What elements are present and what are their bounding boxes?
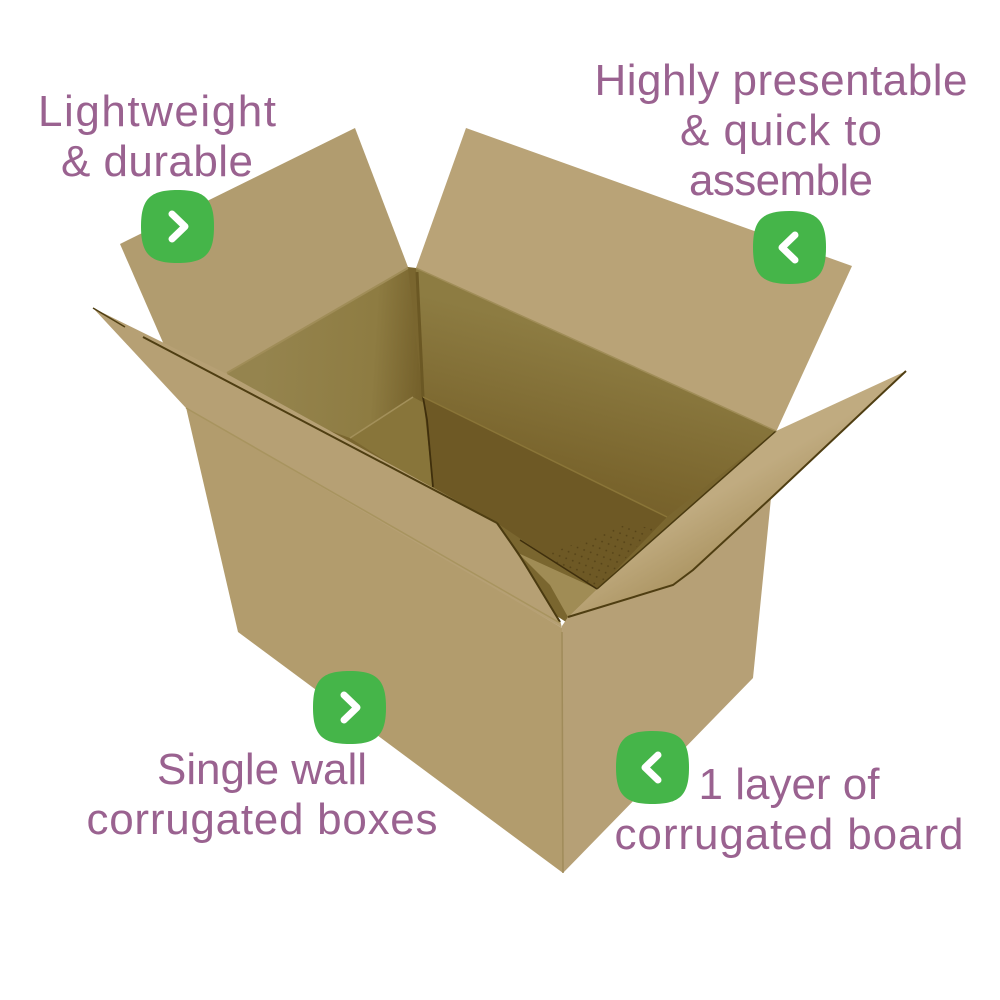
- cardboard box: [93, 128, 906, 873]
- label: highly presentable: & quick to: [680, 106, 882, 155]
- icon: right arrow top left: [141, 190, 214, 263]
- interior back-left wall: [227, 268, 423, 438]
- box edges and creases: [93, 268, 906, 873]
- label: highly presentable: [594, 56, 968, 205]
- label: single wall: corrugated boxes: [86, 795, 438, 844]
- back-right flap: [416, 128, 852, 432]
- label: lightweight and durable: Lightweight: [38, 87, 276, 136]
- interior base: [227, 267, 776, 622]
- label: highly presentable: Highly presentable: [594, 56, 968, 105]
- interior back-right wall: [416, 268, 776, 517]
- label: one layer: corrugated board: [614, 810, 964, 859]
- label: one layer: 1 layer of: [698, 760, 880, 809]
- label: lightweight and durable: & durable: [61, 137, 253, 186]
- icon: left arrow bottom right: [616, 731, 689, 804]
- icon: right arrow bottom left: [313, 671, 386, 744]
- label: single wall: Single wall: [157, 745, 367, 794]
- back-left flap: [120, 128, 408, 420]
- front-left flap: [93, 308, 562, 628]
- icon: left arrow top right: [753, 211, 826, 284]
- interior lower wall: [423, 397, 667, 590]
- dotted shadow on the lower wall: [545, 525, 655, 588]
- inner corner flap: [518, 553, 597, 617]
- interior left floor panel: [350, 397, 433, 490]
- label: single wall: [86, 745, 438, 844]
- right face: [562, 498, 771, 873]
- front face: [185, 403, 563, 873]
- label: one layer: [614, 760, 964, 859]
- label: highly presentable: assemble: [689, 156, 873, 205]
- right flap: [568, 371, 906, 617]
- label: lightweight and durable: [38, 87, 276, 186]
